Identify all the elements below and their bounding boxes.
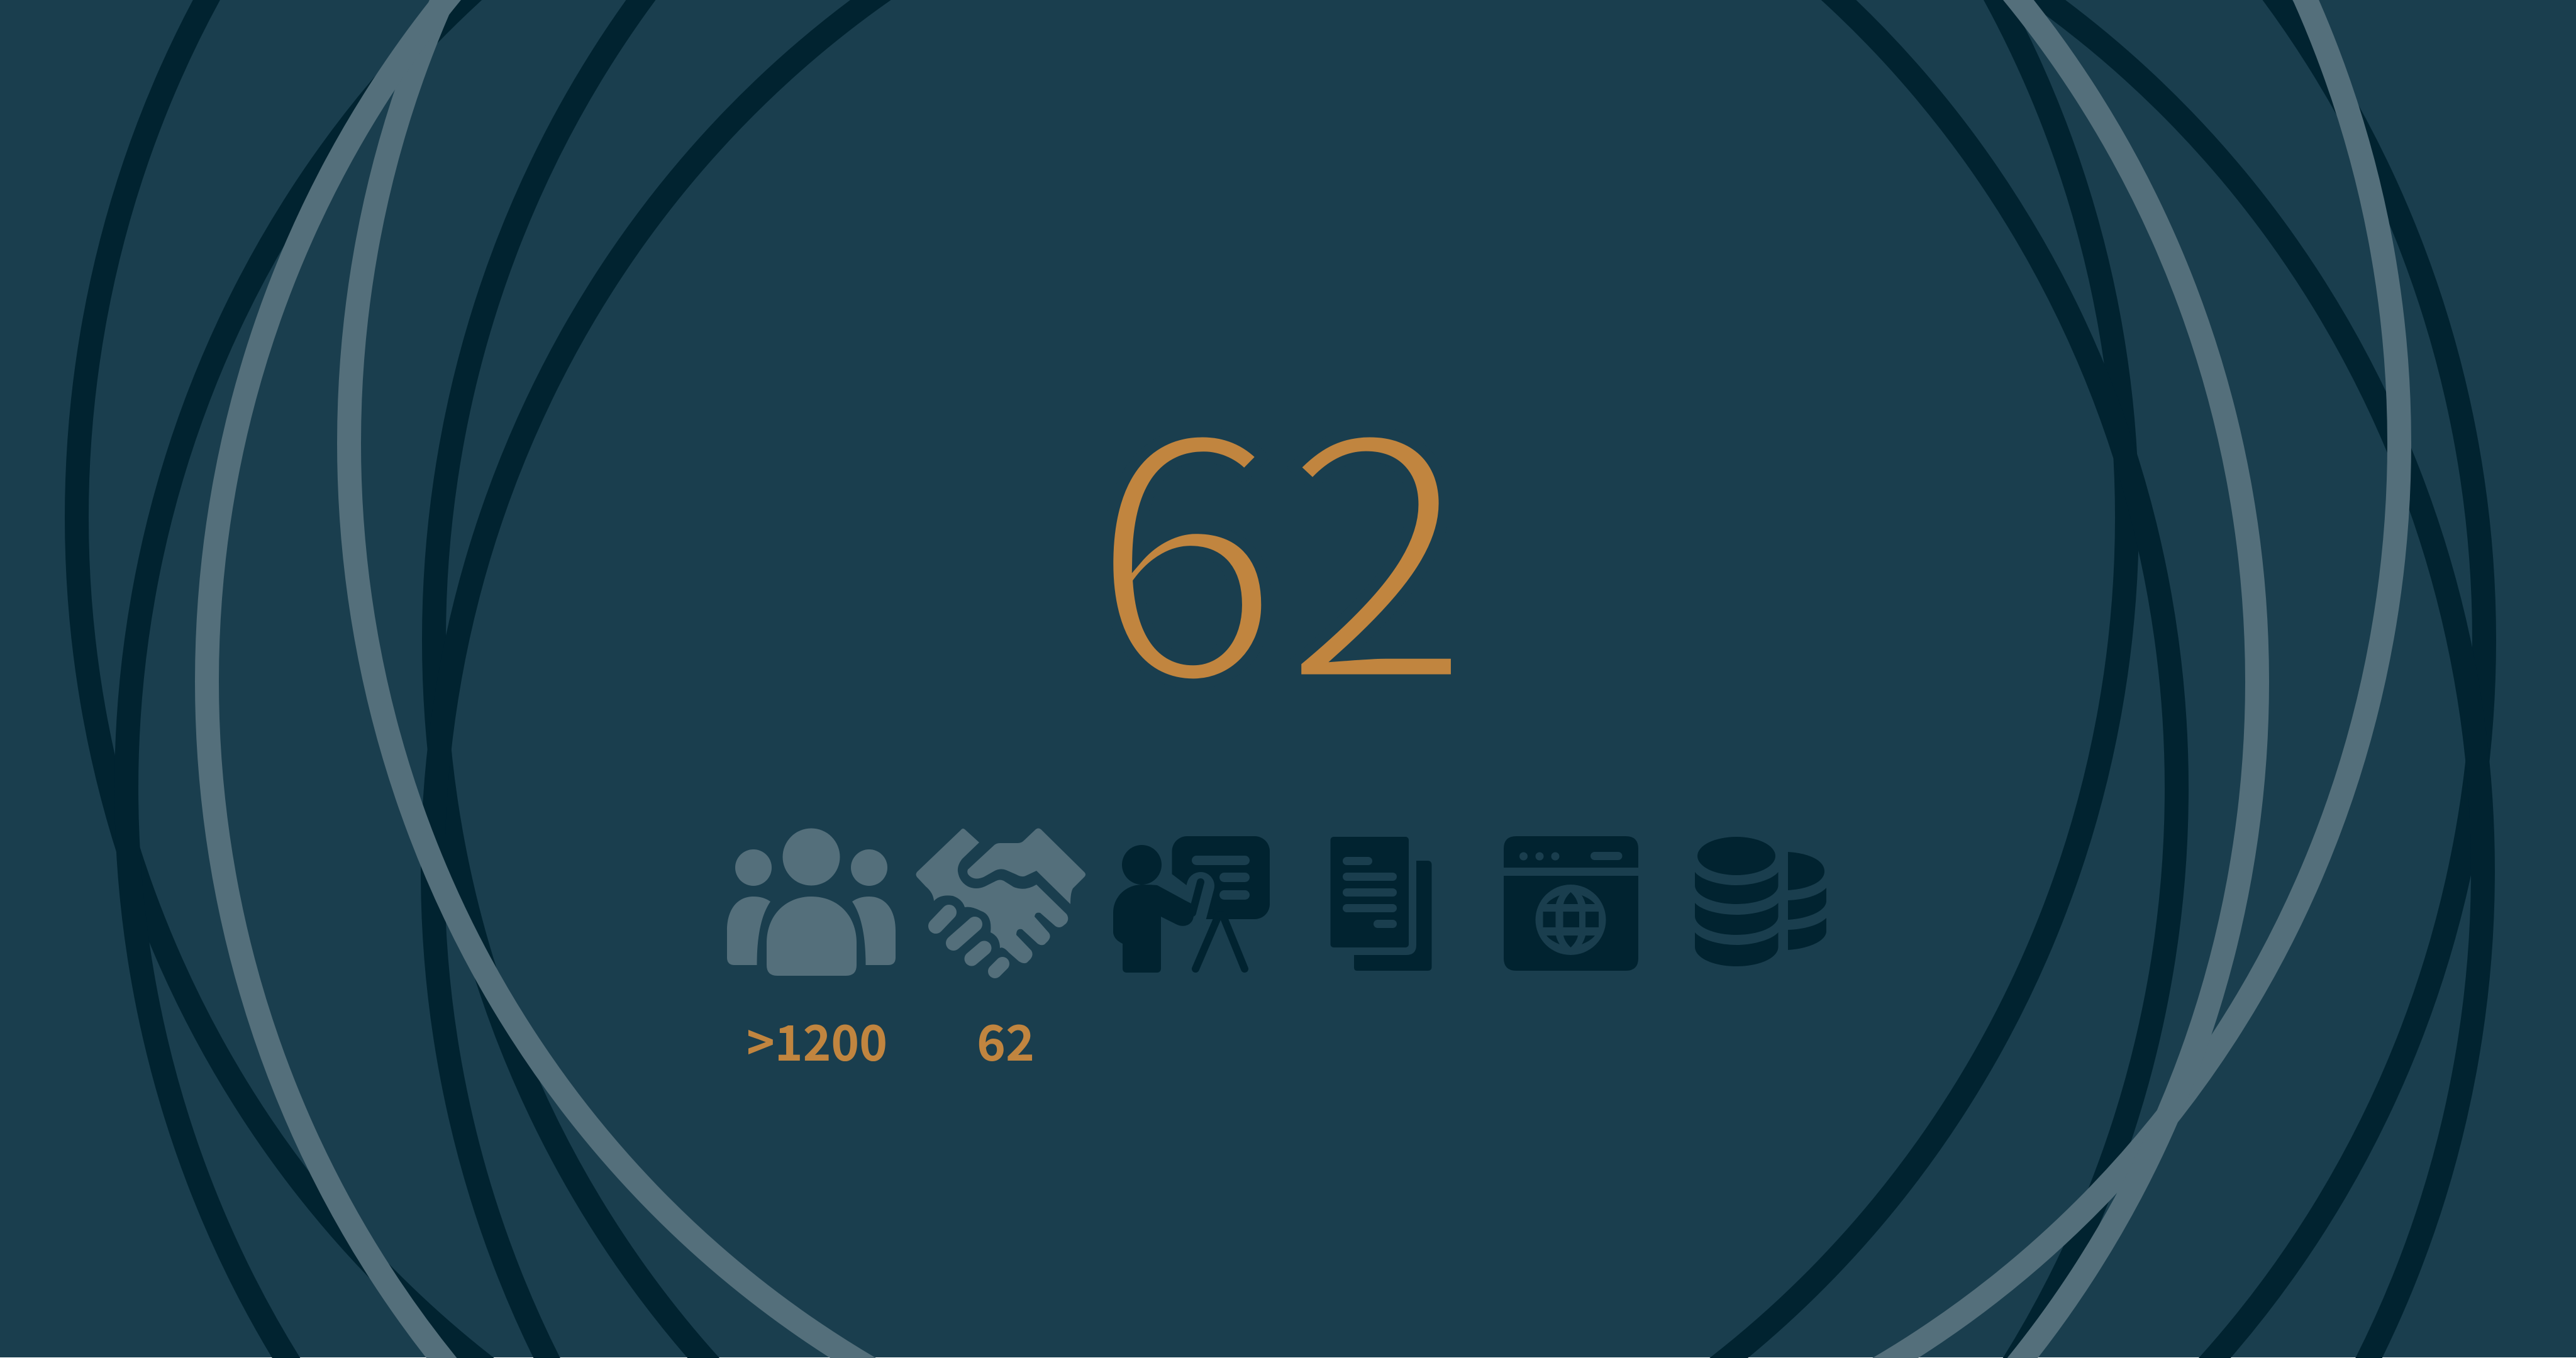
label: greater than 1200: >1200 bbox=[747, 1005, 887, 1075]
icon: database coins bbox=[1695, 837, 1826, 966]
label: 62: 62 bbox=[977, 1005, 1035, 1075]
icon: documents bbox=[1331, 837, 1431, 971]
icon: people bbox=[727, 829, 896, 976]
icon: handshake bbox=[916, 829, 1085, 971]
icon: web browser with globe bbox=[1504, 836, 1638, 971]
icon: presenter at board bbox=[1113, 836, 1270, 973]
big number 62: 62 bbox=[1088, 294, 1474, 775]
